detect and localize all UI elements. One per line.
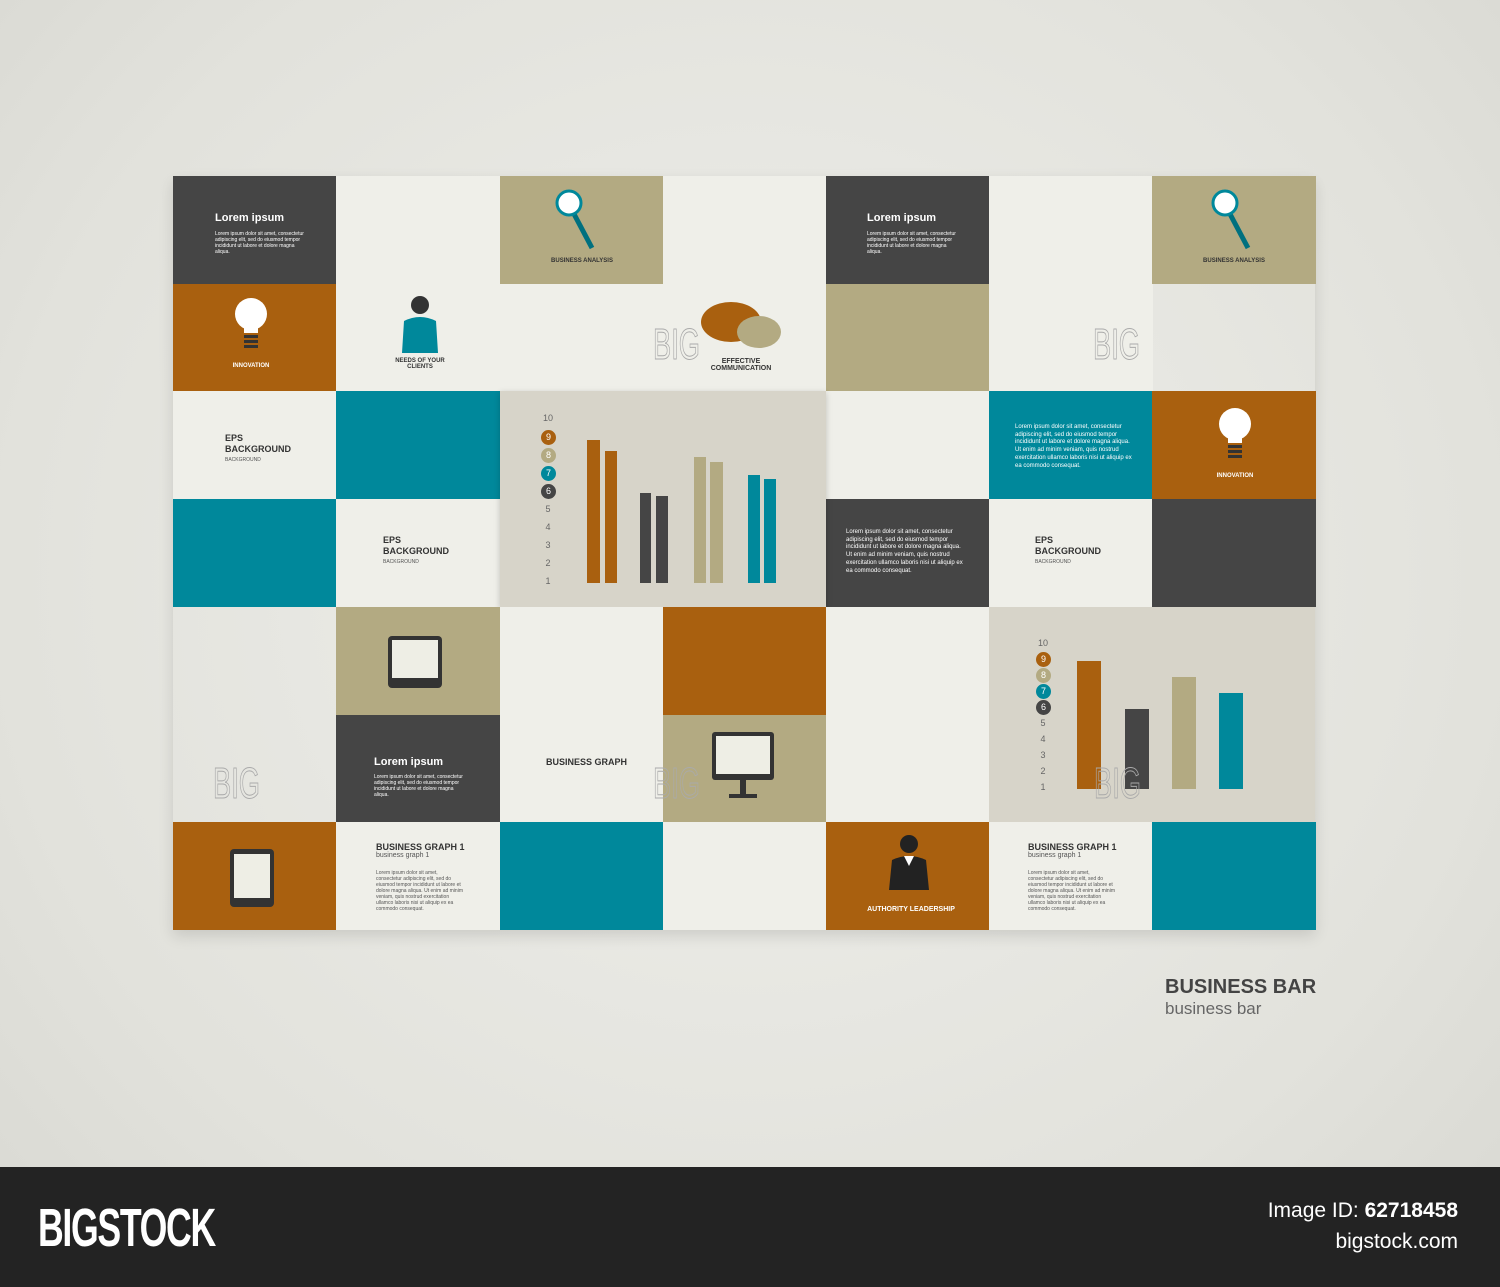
- cell: eps background 2: BACKGROUND: [383, 546, 449, 556]
- cell: needs of clients: NEEDS OF YOUR: [395, 358, 445, 364]
- chart 1: 8: [546, 450, 551, 460]
- cell: business graph: BUSINESS GRAPH: [546, 757, 627, 767]
- cell: needs of clients: [336, 284, 500, 392]
- chart 2: 5: [1040, 718, 1046, 728]
- cell: business graph 1 b: Lorem ipsum dolor sit amet, consectetur adipiscing elit, sed do eiusmod tempor incididunt ut labore et dolore magna aliqua. Ut enim ad minim veniam, quis nostrud exercitation ullamco laboris nisi ut aliquip ex ea commodo consequat.: [1028, 870, 1115, 912]
- cell: eps background: EPS: [225, 433, 243, 443]
- cell: teal text: [989, 391, 1153, 499]
- cell: authority leadership: AUTHORITY LEADERSHIP: [867, 906, 955, 913]
- cell: business graph 1: BUSINESS GRAPH 1: [376, 842, 465, 852]
- chart 1: 4: [545, 522, 550, 532]
- cell: lorem ipsum dark: Lorem ipsum dolor sit amet, consectetur adipiscing elit, sed do eiusmod tempor incididunt ut labore et dolore magna aliqua.: [215, 231, 304, 255]
- logo: BIGSTOCK: [38, 1198, 215, 1258]
- cell: innovation: INNOVATION: [233, 363, 269, 369]
- cell: business graph 1: business graph 1: [376, 852, 429, 859]
- cell: dark text: Lorem ipsum dolor sit amet, consectetur adipiscing elit, sed do eiusmod tempor incididunt ut labore et dolore magna aliqua. Ut enim ad minim veniam, quis nostrud exercitation ullamco laboris nisi ut aliquip ex ea commodo consequat.: [846, 529, 963, 574]
- cell: business analysis: BUSINESS ANALYSIS: [551, 258, 613, 264]
- cell: lorem ipsum dark: [173, 176, 337, 284]
- cell: lorem ipsum dark: Lorem ipsum: [215, 212, 284, 224]
- chart 2: 3: [1040, 750, 1046, 760]
- chart 2: 10: [1038, 638, 1048, 648]
- cell: business graph 1 b: business graph 1: [1028, 852, 1081, 859]
- cell: business analysis 2: [1152, 176, 1316, 284]
- cell: business analysis: [500, 176, 664, 284]
- cell: monitor: [663, 715, 827, 823]
- cell: business analysis 2: BUSINESS ANALYSIS: [1203, 258, 1265, 264]
- cell: business graph: [500, 715, 664, 823]
- chart 1: 6: [546, 486, 551, 496]
- cell: eps background 3: EPS: [1035, 535, 1053, 545]
- chart 2: 7: [1041, 686, 1046, 696]
- chart 1: [500, 391, 826, 607]
- image id: Image ID: 62718458: [1268, 1199, 1458, 1222]
- chart 1: 1: [545, 576, 550, 586]
- chart 1: 2: [545, 558, 550, 568]
- image id: [1268, 1199, 1458, 1253]
- cell: eps background 3: BACKGROUND: [1035, 546, 1101, 556]
- cell: effective communication: [663, 284, 827, 392]
- cell: lorem ipsum dark 2: Lorem ipsum dolor sit amet, consectetur adipiscing elit, sed do eiusmod tempor incididunt ut labore et dolore magna aliqua.: [867, 231, 956, 255]
- chart 2: [989, 607, 1315, 822]
- grid panel: [173, 176, 1315, 930]
- chart 1: 3: [545, 540, 550, 550]
- chart 1: 10: [543, 413, 553, 423]
- chart 2: 2: [1040, 766, 1046, 776]
- cell: tablet: [336, 607, 500, 715]
- cell: lorem ipsum dark 2: [826, 176, 990, 284]
- caption: business bar: [1165, 976, 1316, 1018]
- cell: business graph 1: [336, 822, 500, 930]
- image id: bigstock.com: [1335, 1230, 1458, 1253]
- caption: business bar: BUSINESS BAR: [1165, 976, 1316, 998]
- caption: business bar: business bar: [1165, 999, 1261, 1018]
- cell: effective communication: EFFECTIVE: [722, 358, 760, 365]
- chart 2: 1: [1040, 782, 1046, 792]
- footer bar: [0, 1167, 1500, 1287]
- cell: lorem ipsum dark 3: Lorem ipsum: [374, 756, 443, 768]
- cell: eps background: BACKGROUND: [225, 457, 261, 463]
- cell: eps background 3: [989, 499, 1153, 607]
- cell: eps background 2: BACKGROUND: [383, 559, 419, 565]
- cell: tablet 2: [173, 822, 337, 930]
- cell: innovation 2: INNOVATION: [1217, 473, 1253, 479]
- cell: eps background 2: EPS: [383, 535, 401, 545]
- chart 2: 6: [1041, 702, 1046, 712]
- cell: teal text: Lorem ipsum dolor sit amet, consectetur adipiscing elit, sed do eiusmod tempor incididunt ut labore et dolore magna aliqua. Ut enim ad minim veniam, quis nostrud exercitation ullamco laboris nisi ut aliquip ex ea commodo consequat.: [1015, 424, 1132, 469]
- cell: business graph 1 b: [989, 822, 1153, 930]
- cell: lorem ipsum dark 3: [336, 715, 500, 823]
- chart 1: 9: [546, 432, 551, 442]
- cell: needs of clients: CLIENTS: [407, 364, 433, 370]
- cell: BIG: [989, 284, 1153, 392]
- cell: eps background 3: BACKGROUND: [1035, 559, 1071, 565]
- chart 2: 9: [1041, 654, 1046, 664]
- chart 1: 5: [545, 504, 550, 514]
- cell: lorem ipsum dark 3: Lorem ipsum dolor sit amet, consectetur adipiscing elit, sed do eiusmod tempor incididunt ut labore et dolore magna aliqua.: [374, 774, 463, 798]
- cell: business graph 1: Lorem ipsum dolor sit amet, consectetur adipiscing elit, sed do eiusmod tempor incididunt ut labore et dolore magna aliqua. Ut enim ad minim veniam, quis nostrud exercitation ullamco laboris nisi ut aliquip ex ea commodo consequat.: [376, 870, 463, 912]
- cell: lorem ipsum dark 2: Lorem ipsum: [867, 212, 936, 224]
- cell: eps background 2: [336, 499, 500, 607]
- cell: innovation 2: [1152, 391, 1316, 499]
- cell: innovation: [173, 284, 337, 392]
- cell: eps background: BACKGROUND: [225, 444, 291, 454]
- cell: authority leadership: [826, 822, 990, 930]
- cell: business graph 1 b: BUSINESS GRAPH 1: [1028, 842, 1117, 852]
- cell: eps background: [173, 391, 337, 499]
- chart 2: 8: [1041, 670, 1046, 680]
- chart 2: 4: [1040, 734, 1046, 744]
- chart 1: 7: [546, 468, 551, 478]
- cell: dark text: [826, 499, 990, 607]
- cell: effective communication: COMMUNICATION: [711, 365, 771, 372]
